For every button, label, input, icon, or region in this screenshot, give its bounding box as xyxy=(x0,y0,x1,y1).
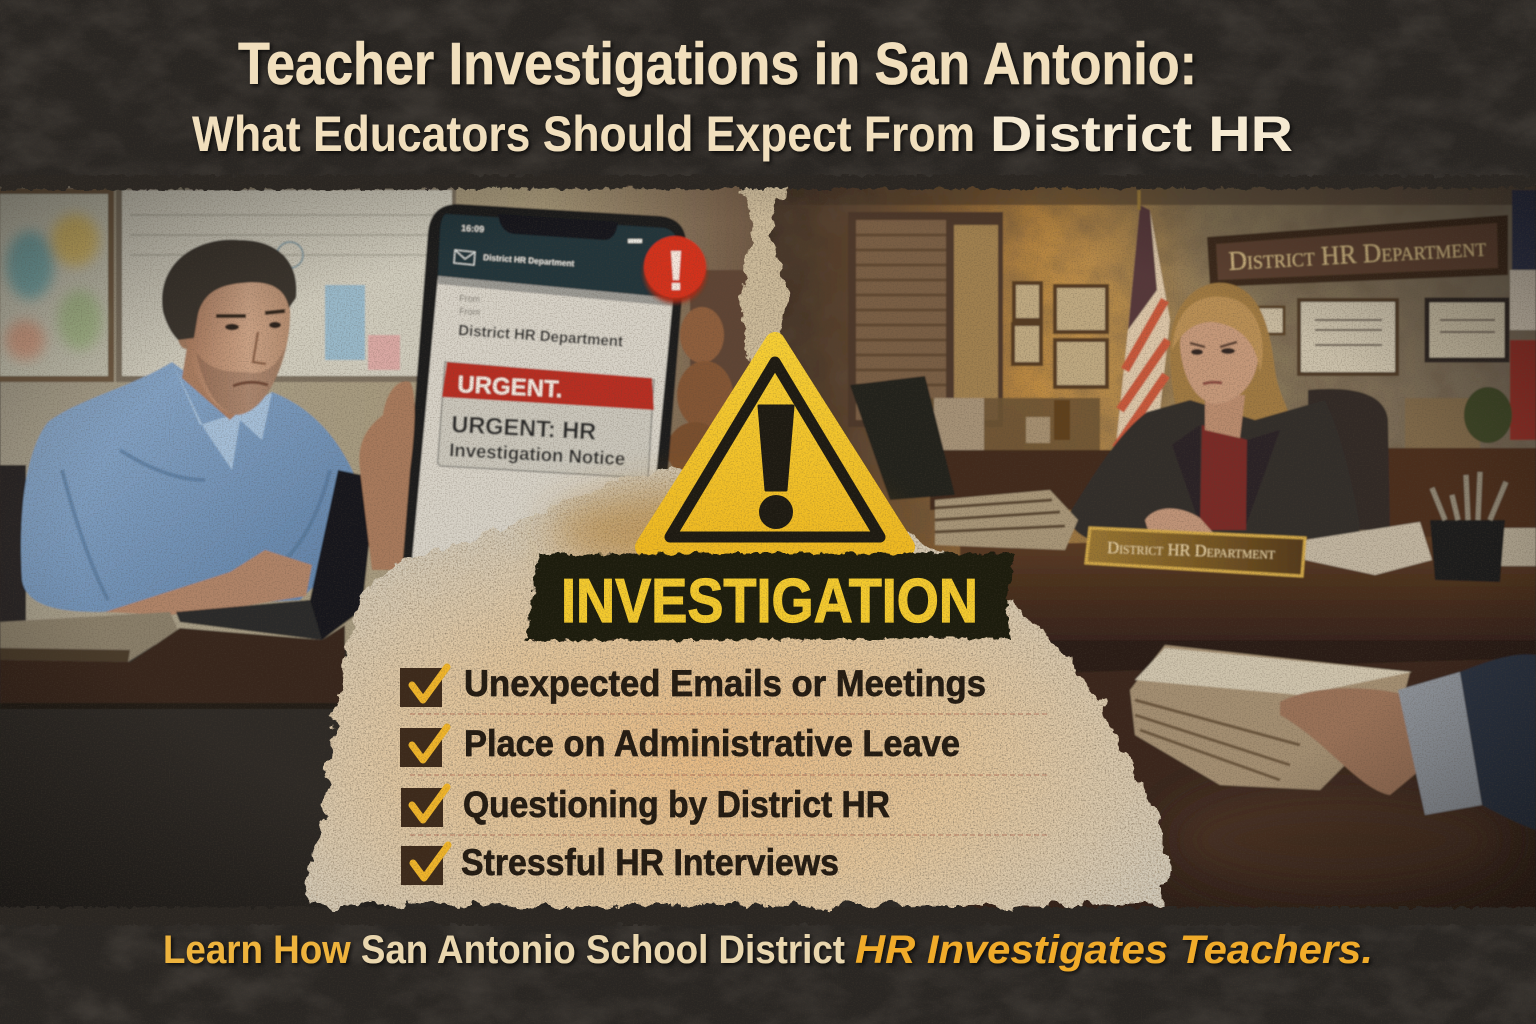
checklist item: Place on Administrative Leave: Place on Administrative Leave xyxy=(464,723,960,764)
footer call to action: Learn How San Antonio School District xyxy=(163,928,845,972)
American flag xyxy=(1115,190,1170,455)
blouse xyxy=(1200,425,1247,530)
checklist item: Unexpected Emails or Meetings: Unexpected Emails or Meetings xyxy=(464,663,986,704)
warning triangle icon xyxy=(645,342,905,547)
panel: teacher in classroom xyxy=(0,185,775,913)
email sender text xyxy=(458,293,624,351)
office wall sign: District HR Department xyxy=(1228,232,1487,276)
notebook xyxy=(0,612,178,662)
alert badge xyxy=(644,236,706,303)
torn paper sheet xyxy=(305,470,1165,905)
dark computer monitor xyxy=(850,376,955,500)
lapels xyxy=(1172,425,1280,525)
email sender text: From xyxy=(459,306,480,317)
chair xyxy=(1308,389,1390,530)
phone status and header text: District HR Department xyxy=(483,252,575,268)
wall frames left xyxy=(1013,283,1107,387)
phone status and header text: 16:09 xyxy=(461,223,484,234)
nameplate xyxy=(1086,528,1305,576)
file folder stack xyxy=(1130,645,1412,790)
investigation banner xyxy=(524,553,1016,641)
HR administrator xyxy=(1068,283,1390,542)
whiteboard xyxy=(116,188,456,382)
office wall xyxy=(768,185,1536,556)
phone status and header text xyxy=(454,223,642,268)
panel: torn paper checklist xyxy=(305,342,1165,905)
paper stack on desk xyxy=(935,490,1078,550)
band shading xyxy=(0,175,1536,925)
laptop xyxy=(176,470,376,640)
classroom wall xyxy=(0,185,775,645)
back shelves and cabinet xyxy=(930,387,1536,558)
footer call to action xyxy=(163,928,1373,972)
sleeve and hand passing file xyxy=(1280,654,1536,830)
torn divider between scenes xyxy=(738,185,790,440)
man: teacher at laptop xyxy=(0,240,376,662)
panel: HR office xyxy=(760,185,1536,910)
subtitle: District HR xyxy=(990,106,1293,162)
window blinds xyxy=(848,212,1003,427)
urgent notice card: URGENT: HR xyxy=(451,411,597,445)
urgent notice card: Investigation Notice xyxy=(449,439,626,469)
office wall sign xyxy=(1207,215,1508,287)
front desk surface xyxy=(960,640,1536,910)
nameplate: District HR Department xyxy=(1107,538,1276,563)
email sender text: From xyxy=(459,293,480,304)
title: Teacher Investigations in San Antonio: xyxy=(238,31,1197,97)
back desk surface xyxy=(960,535,1536,650)
urgent notice card: URGENT. xyxy=(457,371,563,404)
desk surface left xyxy=(0,625,350,913)
Texas flag edge xyxy=(1510,190,1536,440)
subtitle: What Educators Should Expect From xyxy=(192,106,975,162)
investigation banner: INVESTIGATION xyxy=(561,567,978,636)
blazer xyxy=(1068,400,1360,542)
neck and head xyxy=(181,348,236,420)
warm stain behind triangle xyxy=(550,485,890,575)
shirt xyxy=(21,362,356,612)
footer call to action: HR Investigates Teachers. xyxy=(855,928,1373,972)
framed certificates xyxy=(1258,300,1507,374)
forearm and hand xyxy=(105,550,312,615)
title xyxy=(192,31,1293,162)
documents beside nameplate xyxy=(1305,522,1536,575)
urgent notice card xyxy=(438,362,654,478)
hair back xyxy=(1170,283,1292,438)
thumb holding phone xyxy=(359,381,415,570)
neck and face xyxy=(1205,395,1245,438)
fingers behind phone xyxy=(667,307,733,478)
wall map xyxy=(0,188,114,382)
pen holder xyxy=(1430,472,1506,582)
clasped hands xyxy=(1145,508,1216,537)
checklist item: Stressful HR Interviews: Stressful HR Interviews xyxy=(461,842,839,883)
email sender text: District HR Department xyxy=(458,322,624,351)
smartphone xyxy=(402,204,706,570)
checklist item: Questioning by District HR: Questioning by District HR xyxy=(463,784,890,825)
